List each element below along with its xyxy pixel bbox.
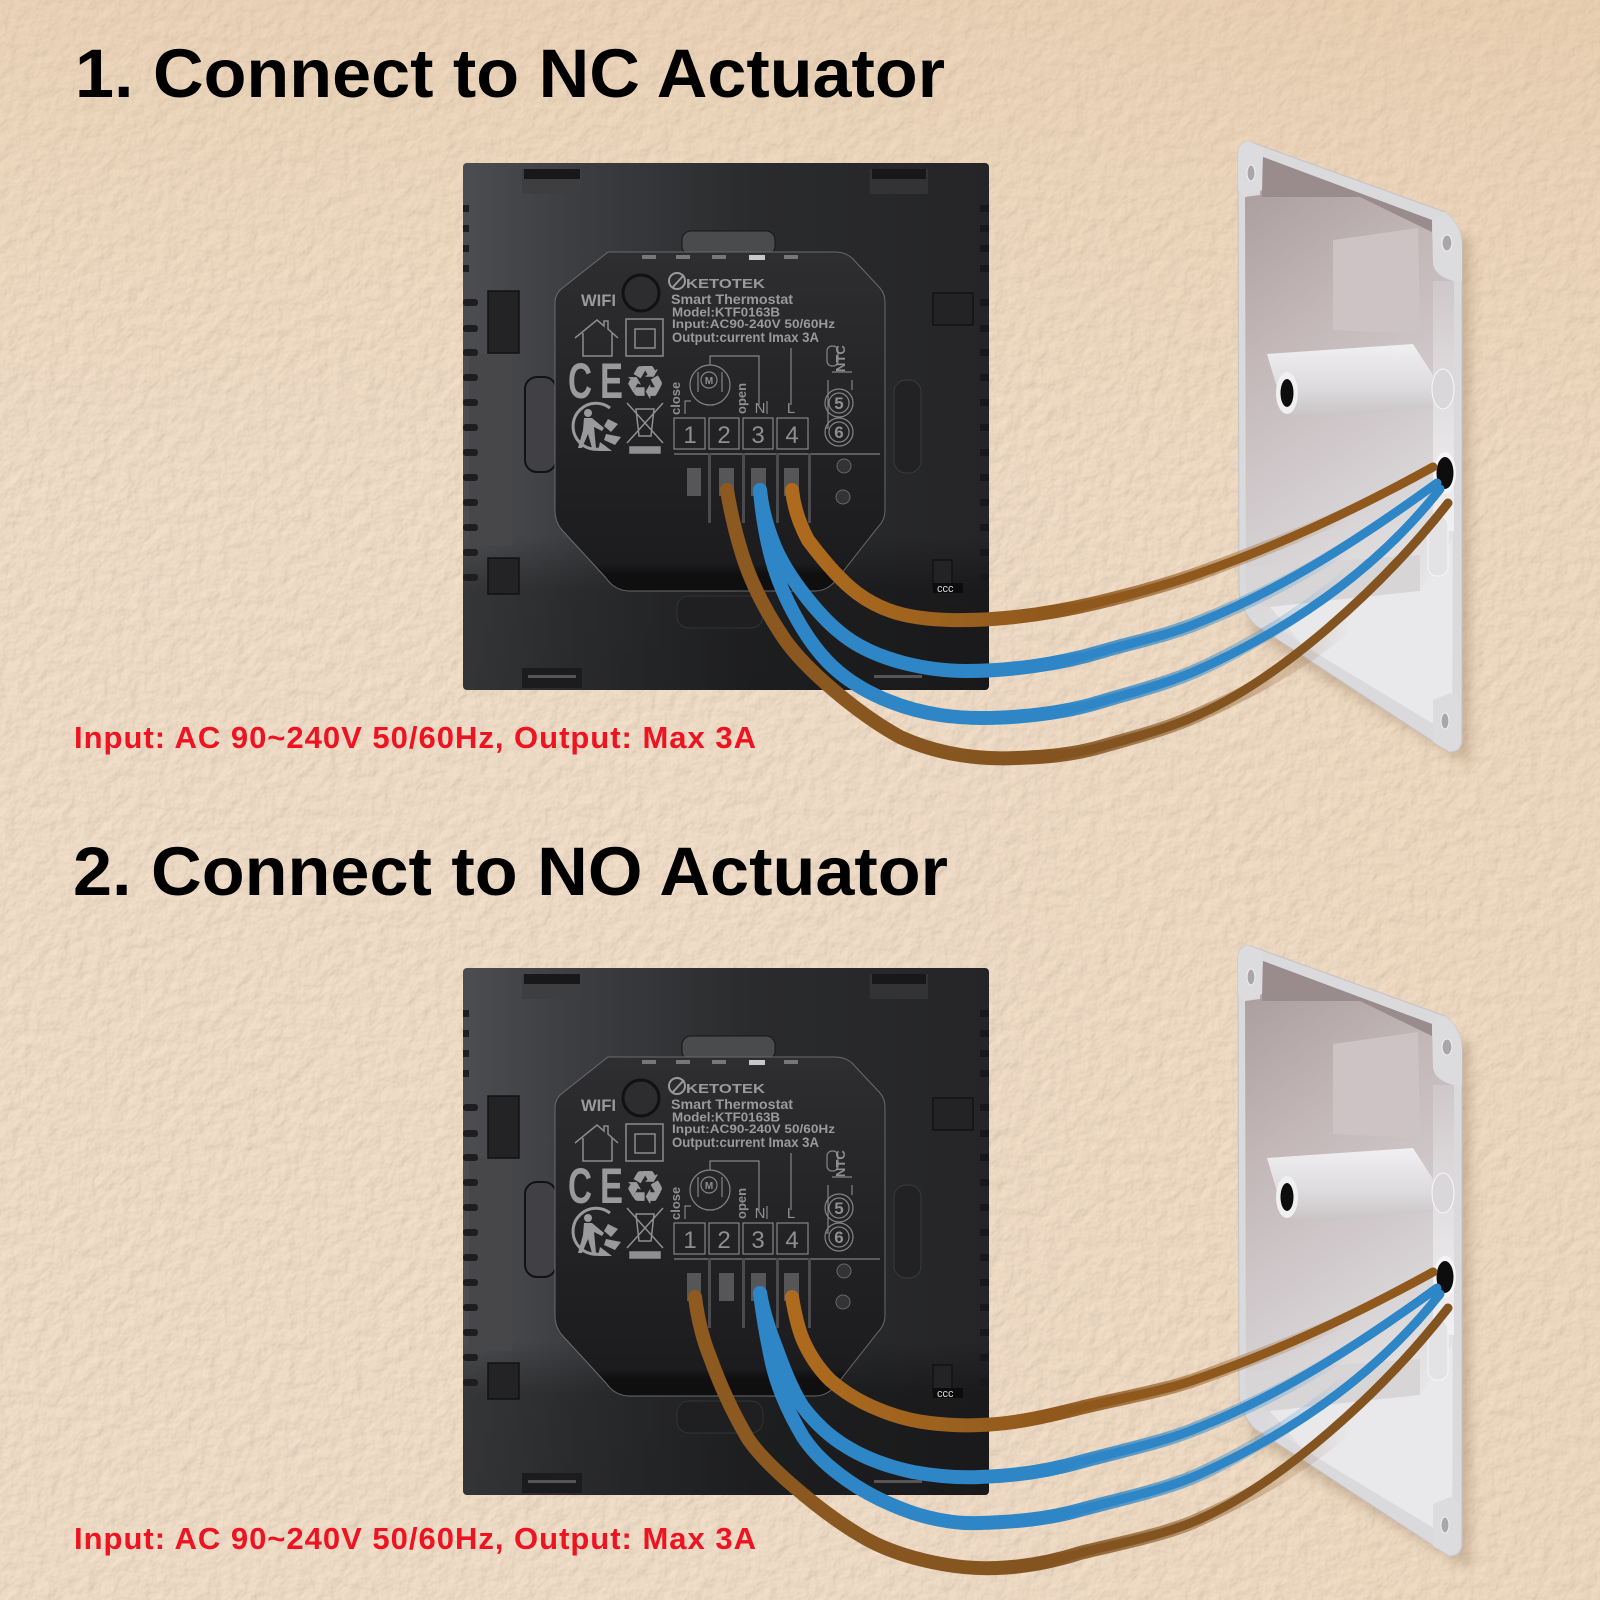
small ccc mark: ccc xyxy=(937,1388,954,1400)
icon: recycle: ♻ xyxy=(625,356,665,409)
lower shadow band xyxy=(463,535,989,690)
wifi button xyxy=(623,275,659,311)
box outer rim xyxy=(1238,945,1462,1556)
icon: CE mark: C xyxy=(568,1158,592,1214)
terminal labels: 2 xyxy=(717,1227,731,1254)
icon: square xyxy=(626,1124,663,1161)
screw holes xyxy=(1247,969,1452,1533)
terminal labels xyxy=(668,1150,848,1254)
thermostat body xyxy=(463,163,989,690)
box right strip with holes xyxy=(1276,1085,1456,1380)
product label text: WIFI xyxy=(581,1096,616,1115)
product label text: KETOTEK xyxy=(686,1081,766,1096)
terminal labels: L xyxy=(787,1205,795,1222)
wire: upper brown to terminal 4 xyxy=(792,1272,1433,1425)
terminal labels: 3 xyxy=(751,422,765,449)
wifi button xyxy=(623,1080,659,1116)
terminal module xyxy=(555,1057,885,1396)
box cross bar xyxy=(1267,1148,1433,1220)
product label text: Smart Thermostat xyxy=(671,292,794,307)
box right strip with holes xyxy=(1276,281,1456,576)
product label text: KETOTEK xyxy=(686,276,766,291)
cable holes xyxy=(1280,1183,1454,1293)
terminal labels: open xyxy=(734,1188,749,1219)
icon: crossed-out bin xyxy=(627,1208,663,1258)
box upper recess xyxy=(1333,1032,1420,1138)
wire: lower brown to terminal 1 xyxy=(695,1297,1448,1568)
icon: crossed-out bin xyxy=(627,403,663,453)
box cavity xyxy=(1245,157,1453,735)
box lower light area xyxy=(1270,540,1452,735)
box cavity xyxy=(1245,961,1453,1539)
left edge teeth xyxy=(463,205,478,581)
product label text xyxy=(581,1081,835,1150)
terminal labels xyxy=(668,345,848,449)
terminal labels: N xyxy=(755,400,765,417)
right edge teeth xyxy=(980,1010,989,1386)
product label text xyxy=(581,276,835,345)
box lower light area xyxy=(1270,1344,1452,1539)
terminal labels: M xyxy=(705,1181,713,1192)
product label text: Output:current Imax 3A xyxy=(672,1134,819,1150)
icon: CE mark xyxy=(568,1158,623,1214)
wires: NO wiring xyxy=(695,1272,1448,1568)
cable holes xyxy=(1280,379,1454,489)
panel: wall box, NC wiring xyxy=(1238,141,1470,765)
wire: upper brown to terminal 4 xyxy=(792,467,1433,620)
wiring diagram xyxy=(674,346,853,449)
top and bottom clips xyxy=(522,974,928,1493)
thermostat body xyxy=(463,968,989,1495)
box corner pads xyxy=(1238,945,1462,1556)
wires: NC wiring xyxy=(727,467,1448,758)
product label text: Model:KTF0163B xyxy=(672,306,780,320)
terminal module xyxy=(555,252,885,591)
icon: square xyxy=(626,319,663,356)
side stripe and frame detail xyxy=(469,1158,512,1351)
terminal connector row xyxy=(674,453,880,523)
terminal labels: 5 xyxy=(834,1199,844,1218)
icon: ketotek logo xyxy=(669,273,685,289)
terminal labels: open xyxy=(734,383,749,414)
voltage note: NC: Input: AC 90~240V 50/60Hz, Output: Max 3A xyxy=(74,720,756,755)
wiring diagram xyxy=(674,1151,853,1254)
module top tabs xyxy=(642,255,798,260)
box corner pads xyxy=(1238,141,1462,752)
terminal labels: L xyxy=(787,400,795,417)
box cross bar xyxy=(1267,344,1433,416)
product label text: Input:AC90-240V 50/60Hz xyxy=(672,317,835,331)
terminal labels: 5 xyxy=(834,394,844,413)
top and bottom clips xyxy=(522,169,928,688)
screw holes xyxy=(1247,165,1452,729)
terminal labels: 2 xyxy=(717,422,731,449)
terminal labels: 1 xyxy=(683,1227,697,1254)
terminal labels: NTC xyxy=(833,1150,848,1177)
terminal labels: N xyxy=(755,1205,765,1222)
small ccc mark xyxy=(933,583,963,595)
icon: house xyxy=(575,320,618,356)
terminal labels: 4 xyxy=(785,422,799,449)
box shadow xyxy=(1250,964,1470,1569)
wire: upper blue to terminal 3 xyxy=(760,483,1437,671)
small ccc mark xyxy=(933,1388,963,1400)
terminal labels: M xyxy=(705,376,713,387)
box shadow xyxy=(1250,160,1470,765)
product label text: Model:KTF0163B xyxy=(672,1110,780,1124)
title: connect to NC actuator: 1. Connect to NC Actuator xyxy=(75,35,945,112)
terminal labels: close xyxy=(668,1187,683,1220)
icon: recycling person xyxy=(573,1208,621,1256)
voltage note: NO: Input: AC 90~240V 50/60Hz, Output: Max 3A xyxy=(74,1521,756,1556)
mounting slots xyxy=(525,231,921,628)
panel: wall box, NO wiring xyxy=(1238,945,1470,1569)
right edge teeth xyxy=(980,205,989,581)
lower shadow band xyxy=(463,1340,989,1495)
wire: lower brown to terminal 2 xyxy=(727,490,1448,758)
terminal labels: 6 xyxy=(834,423,844,442)
product label text: WIFI xyxy=(581,291,616,310)
mounting slots xyxy=(525,1036,921,1433)
side stripe and frame detail xyxy=(469,353,512,546)
icon: house xyxy=(575,1125,618,1161)
terminal labels: close xyxy=(668,382,683,415)
terminal labels: 1 xyxy=(683,422,697,449)
icon: recycle: ♻ xyxy=(625,1161,665,1214)
icon: CE mark: E xyxy=(600,353,623,409)
title: connect to NO actuator: 2. Connect to NO Actuator xyxy=(73,833,948,910)
icon: ketotek logo xyxy=(669,1078,685,1094)
wire: lower blue to terminal 3 xyxy=(760,489,1440,718)
panel: thermostat back, NC wiring xyxy=(463,163,989,690)
top cavity shadow xyxy=(1262,961,1432,1036)
product label text: Smart Thermostat xyxy=(671,1097,794,1112)
left edge teeth xyxy=(463,1010,478,1386)
box lower bar xyxy=(1247,1359,1420,1411)
product label text: Output:current Imax 3A xyxy=(672,329,819,345)
box upper recess xyxy=(1333,228,1420,334)
terminal labels: 6 xyxy=(834,1228,844,1247)
terminal labels: 4 xyxy=(785,1227,799,1254)
box lower bar xyxy=(1247,555,1420,607)
side latches xyxy=(488,291,973,594)
terminal labels: NTC xyxy=(833,345,848,372)
side latches xyxy=(488,1096,973,1399)
top cavity shadow xyxy=(1262,157,1432,232)
terminal labels: 3 xyxy=(751,1227,765,1254)
product label text: Input:AC90-240V 50/60Hz xyxy=(672,1122,835,1136)
terminal connector row xyxy=(674,1258,880,1328)
icon: recycling person xyxy=(573,403,621,451)
icon: CE mark: C xyxy=(568,353,592,409)
small ccc mark: ccc xyxy=(937,583,954,595)
icon: CE mark: E xyxy=(600,1158,623,1214)
wire: upper blue to terminal 3 xyxy=(760,1288,1437,1477)
wire: lower blue to terminal 3 xyxy=(760,1293,1440,1523)
icon: CE mark xyxy=(568,353,623,409)
panel: thermostat back, NO wiring xyxy=(463,968,989,1495)
module top tabs xyxy=(642,1060,798,1065)
box outer rim xyxy=(1238,141,1462,752)
